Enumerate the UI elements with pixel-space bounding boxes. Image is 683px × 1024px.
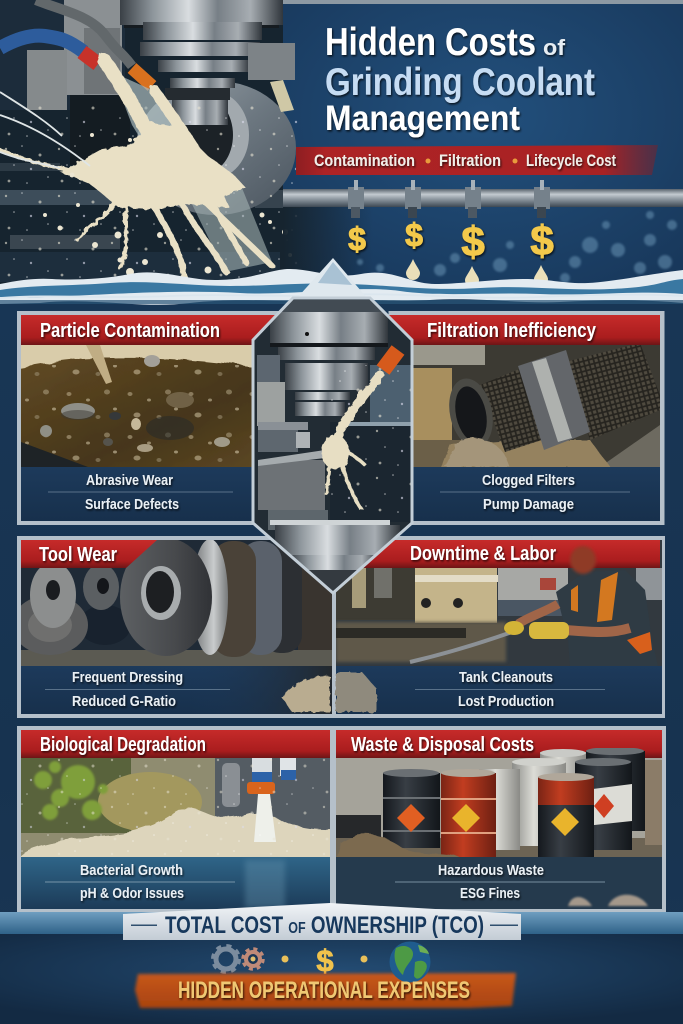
wave peak above hexagon — [297, 258, 367, 298]
panel header — [21, 540, 157, 568]
panel: waste and disposal costs — [334, 728, 664, 912]
panel text block: Abrasive Wear — [86, 473, 173, 489]
panel text block: Surface Defects — [85, 497, 179, 513]
panel: tool wear — [12, 538, 334, 716]
panel: biological degradation — [15, 728, 335, 912]
panel heading: Biological Degradation — [40, 734, 206, 756]
photo: clogged filter — [410, 343, 660, 472]
background droplets — [357, 211, 677, 283]
panel text block — [336, 666, 662, 714]
subtitle banner: Lifecycle Cost — [526, 151, 616, 170]
spindle rings — [120, 0, 283, 25]
panel text block: ESG Fines — [460, 886, 520, 902]
panel header — [21, 315, 278, 345]
panel heading: Waste & Disposal Costs — [351, 734, 534, 756]
panel heading: Filtration Inefficiency — [427, 320, 597, 342]
splash droplets — [43, 133, 292, 276]
speckle — [0, 105, 300, 285]
title: of — [543, 35, 566, 60]
panel: downtime and labor — [334, 538, 664, 716]
panel text block: Hazardous Waste — [438, 863, 544, 879]
panel frame — [18, 312, 318, 524]
panel frame — [18, 728, 334, 912]
panel text block — [21, 467, 256, 521]
machine photo — [0, 0, 300, 290]
blue and grey hoses — [0, 36, 84, 52]
title — [325, 21, 595, 138]
icon: gears — [213, 946, 263, 972]
barrels — [540, 752, 586, 773]
panel text block: Lost Production — [458, 694, 554, 710]
total cost of ownership band — [0, 903, 683, 940]
bullet — [360, 956, 368, 962]
bullet — [282, 956, 288, 962]
icon: globe — [390, 942, 430, 982]
panel text block: Clogged Filters — [482, 473, 575, 489]
coolant wave divider — [0, 269, 683, 305]
icon: dollar: $ — [316, 943, 334, 978]
photo: gravel and mud — [21, 345, 252, 467]
panel text block: Tank Cleanouts — [459, 670, 553, 686]
panel heading: Downtime & Labor — [410, 543, 556, 565]
photo: waste barrels — [335, 747, 662, 860]
panel text block: Bacterial Growth — [80, 863, 183, 879]
heading: TOTAL COST OF OWNERSHIP (TCO) — [165, 912, 484, 939]
photo: bacterial growth — [21, 758, 330, 857]
footer backdrop — [0, 934, 683, 1024]
dollar signs: $ — [461, 218, 485, 265]
panel heading: Particle Contamination — [40, 320, 220, 342]
subtitle banner: Filtration — [439, 151, 501, 170]
plate — [123, 903, 521, 940]
panel text block — [336, 857, 662, 909]
worker head overlapping header — [570, 546, 596, 574]
panel frame — [334, 538, 664, 716]
photo: grinding wheels — [12, 538, 332, 666]
panel header — [361, 540, 660, 568]
dollar signs — [348, 217, 554, 265]
subtitle banner: Contamination — [314, 151, 415, 170]
wave peak shading — [318, 262, 352, 285]
photo: worker cleaning tank — [336, 540, 662, 666]
pipe valves — [348, 180, 550, 218]
hero panel — [0, 0, 683, 292]
panel text block: Reduced G-Ratio — [72, 694, 176, 710]
panel text block — [412, 467, 660, 521]
grinding wheel — [136, 81, 296, 215]
orange banner — [135, 973, 516, 1008]
dollar signs: $ — [405, 217, 423, 253]
panel text block — [21, 857, 330, 909]
panel text block — [21, 666, 332, 714]
panel header — [388, 315, 660, 345]
top metal strip — [283, 0, 683, 4]
translucent coolant sheets — [124, 78, 172, 136]
dollar signs: $ — [530, 217, 554, 264]
panel: particle contamination — [17, 311, 278, 525]
panel text block: Frequent Dressing — [72, 670, 183, 686]
band — [0, 912, 683, 934]
panel frame — [390, 312, 663, 524]
splash streaks — [0, 92, 90, 168]
panel frame — [18, 538, 334, 716]
panel: filtration inefficiency — [388, 312, 663, 524]
subtitle banner — [296, 145, 658, 175]
hexagon photo: spindle and coolant — [254, 300, 410, 591]
title: Grinding Coolant — [325, 61, 595, 104]
dark fade into title area — [283, 207, 373, 292]
panel text block: pH & Odor Issues — [80, 886, 184, 902]
panel text block: Pump Damage — [483, 497, 574, 513]
coolant stream — [0, 60, 272, 282]
title backdrop — [283, 0, 683, 290]
center hexagon panel — [250, 258, 420, 595]
panel heading: Tool Wear — [39, 544, 117, 566]
title: Hidden Costs — [325, 21, 536, 64]
dollar signs: $ — [348, 221, 366, 257]
banner text: HIDDEN OPERATIONAL EXPENSES — [178, 977, 470, 1004]
coolant jet in hexagon — [321, 375, 380, 510]
icon row — [135, 942, 516, 1008]
coolant drops — [406, 259, 548, 287]
hexagon frame — [253, 298, 412, 593]
panel frame — [334, 728, 664, 912]
title: Management — [325, 99, 520, 138]
pipe — [283, 189, 683, 207]
panel header — [336, 730, 662, 758]
panel header — [21, 730, 330, 758]
